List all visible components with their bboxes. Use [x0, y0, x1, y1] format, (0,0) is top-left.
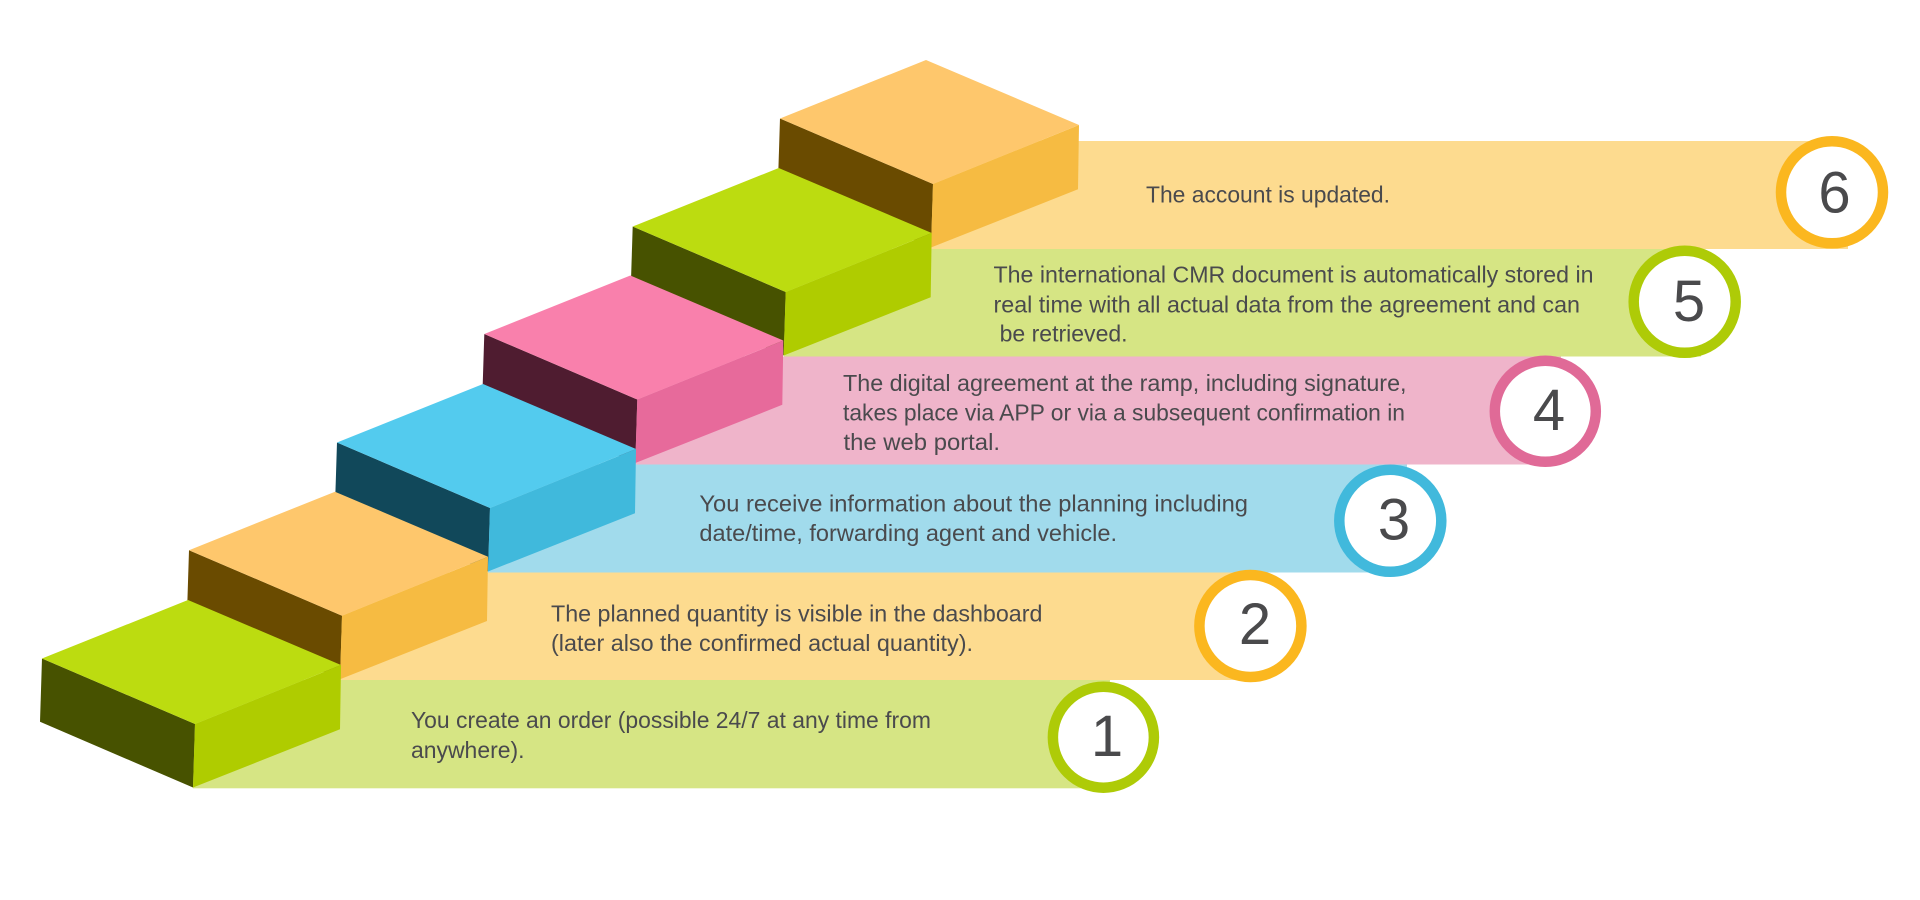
block: step 5 [631, 168, 932, 356]
text: step 1 [411, 707, 931, 763]
ring: number 3 [1339, 470, 1441, 572]
text: step 1: anywhere). [411, 737, 524, 763]
text: step 5: The international CMR document is automatically stored in [994, 261, 1594, 287]
block: step 6 [778, 60, 1079, 248]
band: step 2 [340, 572, 1266, 680]
text: step 4 [843, 370, 1406, 455]
band: step 6 [931, 141, 1848, 249]
text: step 4: The digital agreement at the ramp, including signature, [843, 370, 1406, 396]
ring: number 5 [1634, 251, 1736, 353]
staircase blocks [40, 60, 1079, 788]
band: step 3 [488, 464, 1407, 572]
block: step 3 [335, 384, 636, 572]
ring: number 4 [1495, 361, 1596, 462]
ring: number 2: 2 [1239, 592, 1271, 657]
text: step 5 [994, 261, 1594, 347]
text: step 6: The account is updated. [1146, 182, 1390, 208]
text: step 3 [699, 491, 1248, 546]
ring: number 3: 3 [1378, 488, 1410, 552]
text: step 2 [551, 600, 1042, 656]
block: step 2 [187, 492, 488, 679]
block: step 1 [40, 600, 341, 788]
coloured step bands [193, 141, 1848, 788]
block: step 4 [482, 276, 783, 463]
band: step 5 [784, 249, 1701, 356]
text: step 4: the web portal. [844, 429, 1000, 455]
ring: number 1: 1 [1091, 704, 1123, 769]
text: step 2: (later also the confirmed actual quantity). [551, 630, 973, 656]
text: step 3: You receive information about the planning including [699, 491, 1248, 517]
text: step 2: The planned quantity is visible in the dashboard [551, 600, 1042, 626]
ring: number 2 [1199, 575, 1301, 677]
text: step 1: You create an order (possible 24/7 at any time from [411, 707, 931, 733]
text: step 5: real time with all actual data from the agreement and can [994, 291, 1580, 317]
numbered rings [1053, 141, 1883, 788]
ring: number 6 [1781, 141, 1883, 243]
ring: number 4: 4 [1533, 378, 1565, 443]
ring: number 6: 6 [1818, 160, 1851, 226]
ring: number 1 [1053, 687, 1154, 788]
band: step 4 [635, 356, 1561, 464]
text: step 4: takes place via APP or via a subsequent confirmation in [843, 400, 1405, 426]
text: step 5: be retrieved. [1000, 321, 1128, 347]
band: step 1 [193, 680, 1110, 788]
text: step 3: date/time, forwarding agent and vehicle. [699, 520, 1117, 546]
ring: number 5: 5 [1673, 269, 1705, 334]
